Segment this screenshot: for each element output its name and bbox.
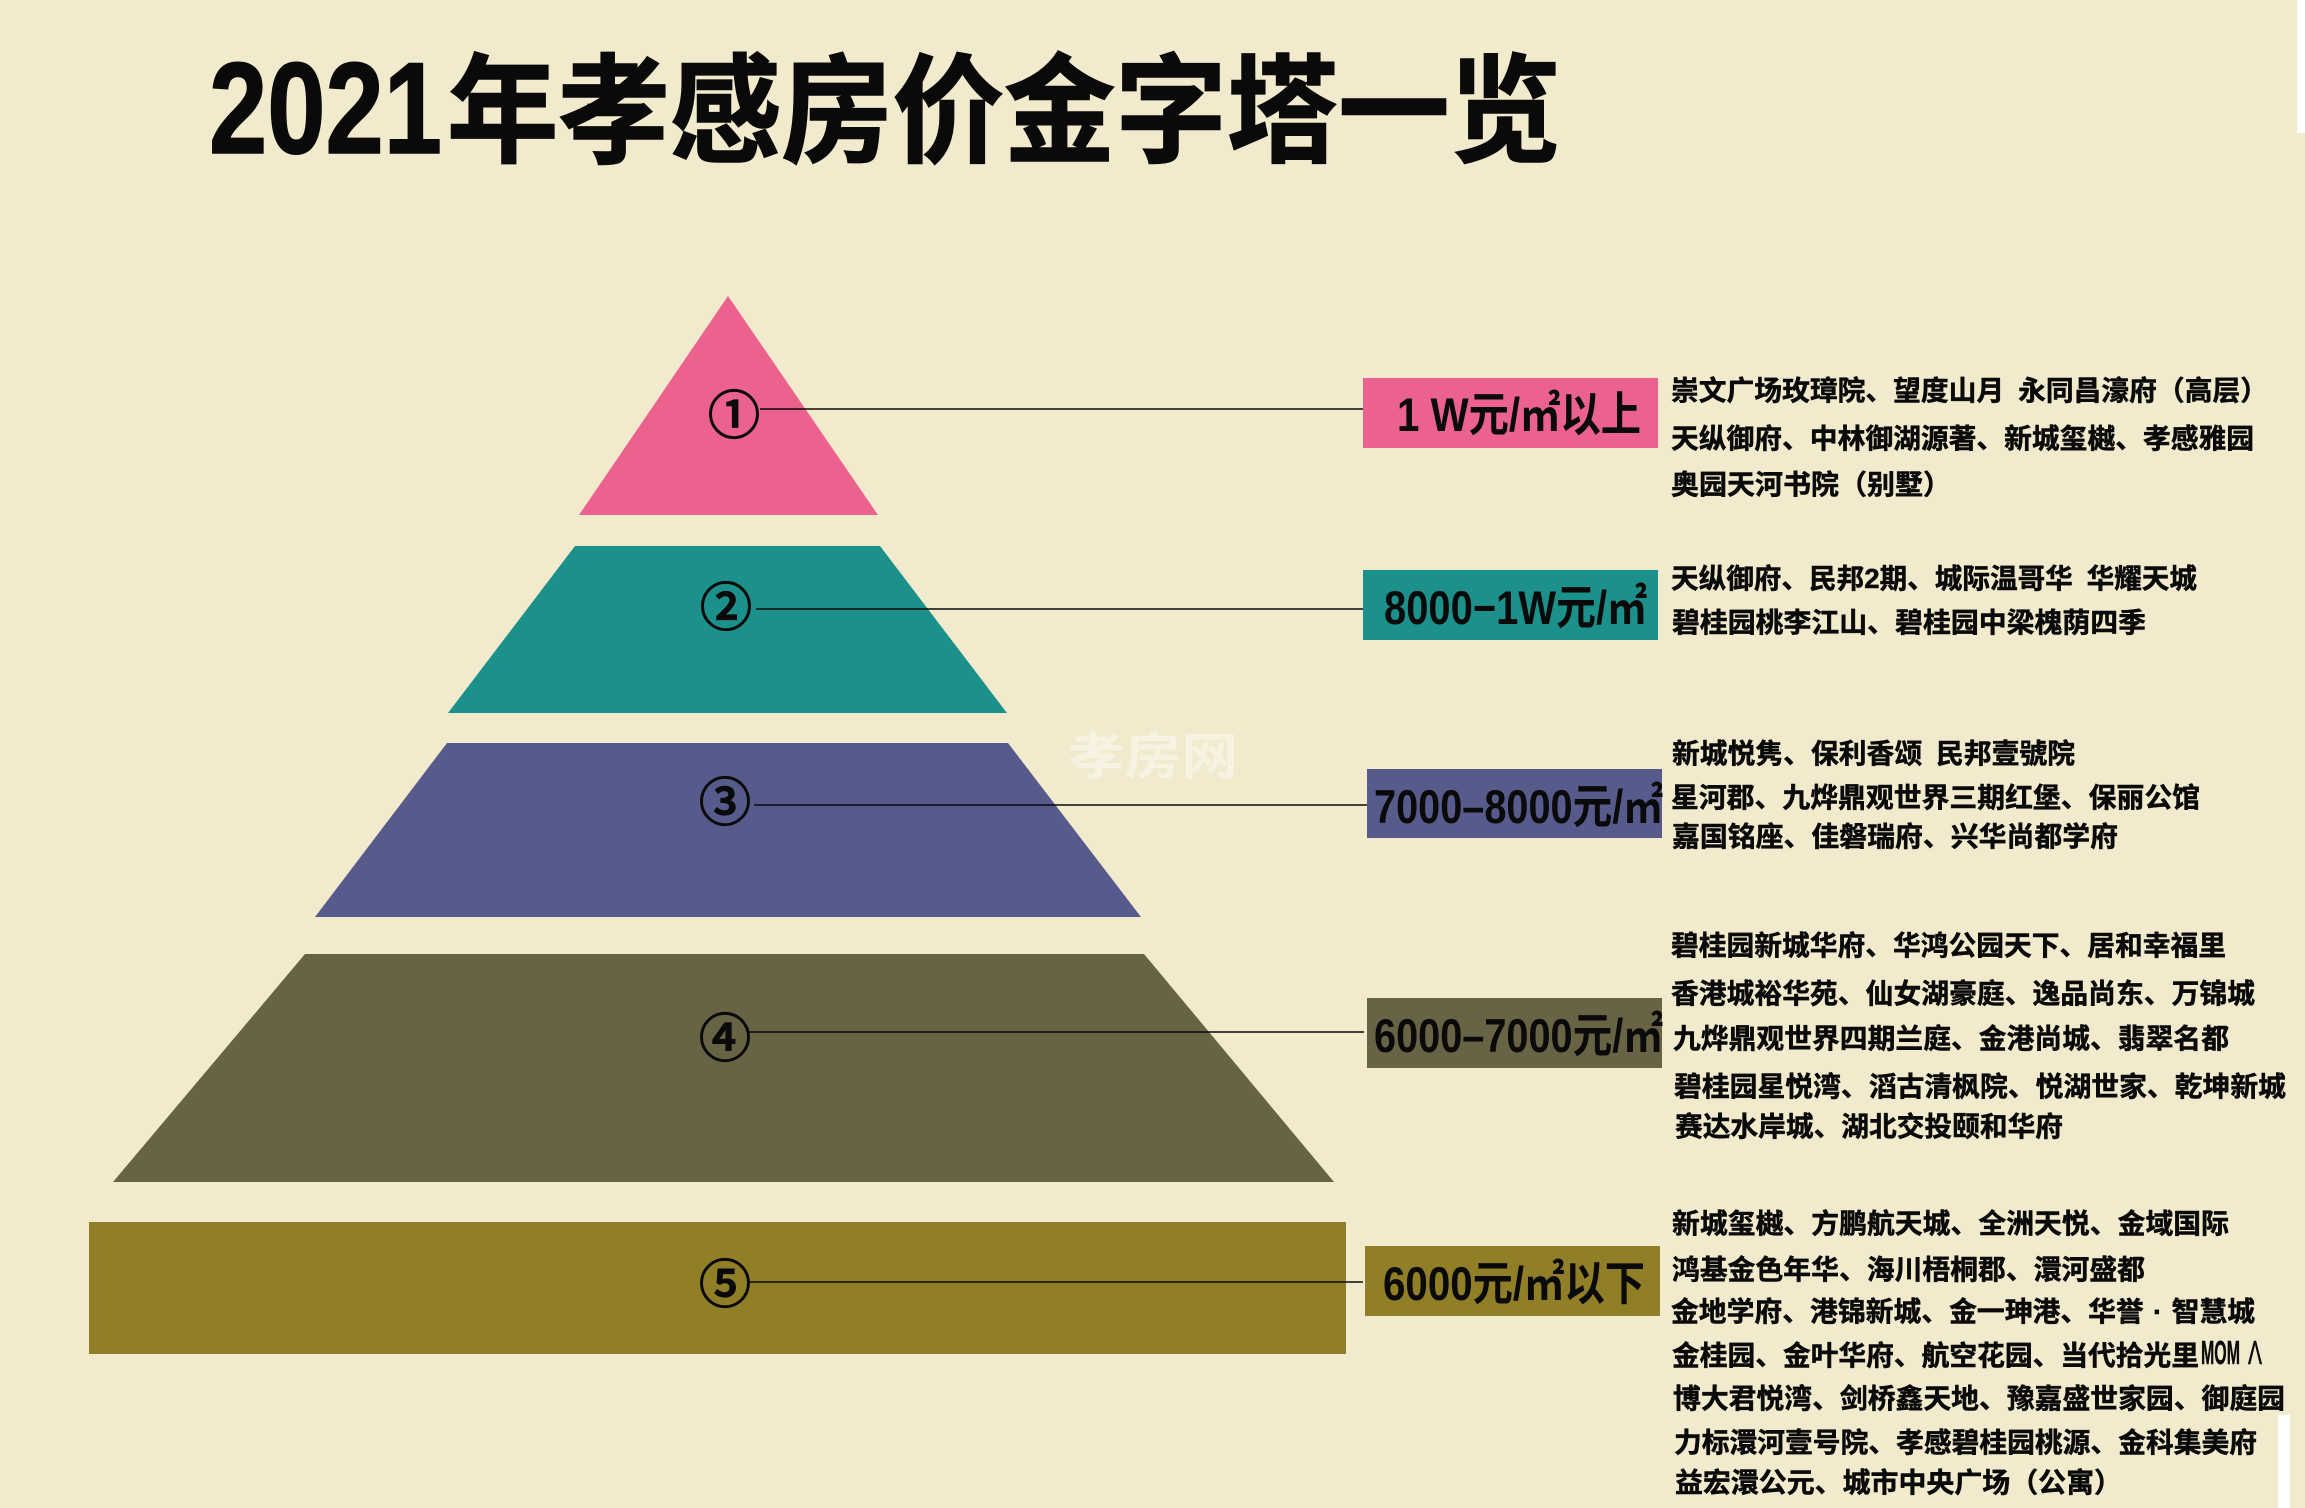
watermark: 孝房网	[1068, 729, 1238, 785]
pyramid segment 3	[315, 743, 1141, 917]
project list 1	[1671, 375, 2268, 500]
price label 2	[1363, 570, 1658, 640]
project list 1: 天纵御府、中林御湖源著、新城玺樾、孝感雅园	[1671, 423, 2254, 454]
price label 5: 6000元/㎡以下	[1383, 1257, 1645, 1310]
project list 5: 益宏澴公元、城市中央广场（公寓）	[1675, 1467, 2122, 1498]
connector 2	[756, 608, 1363, 610]
connector 5	[747, 1281, 1363, 1283]
panel: tier 2	[448, 546, 2197, 713]
project list 4: 赛达水岸城、湖北交投颐和华府	[1675, 1111, 2063, 1142]
connector 3	[754, 804, 1367, 806]
project list 5: 力标澴河壹号院、孝感碧桂园桃源、金科集美府	[1674, 1427, 2257, 1458]
project list 4: 碧桂园新城华府、华鸿公园天下、居和幸福里	[1671, 930, 2226, 961]
project list 5: MOM	[2201, 1334, 2240, 1371]
project list 4: 碧桂园星悦湾、滔古清枫院、悦湖世家、乾坤新城	[1674, 1071, 2286, 1102]
project list 5: 博大君悦湾、剑桥鑫天地、豫嘉盛世家园、御庭园	[1673, 1383, 2285, 1414]
pyramid segment 5	[89, 1222, 1346, 1354]
project list 2: 天纵御府、民邦2期、城际温哥华 华耀天城	[1671, 563, 2197, 594]
marker 3: ③	[699, 761, 751, 836]
pyramid segment 2	[448, 546, 1007, 713]
price label 4: 6000–7000元/㎡	[1374, 1009, 1663, 1062]
panel: tier 4	[113, 930, 2286, 1182]
project list 5: 新城玺樾、方鹏航天城、全洲天悦、金域国际	[1672, 1208, 2229, 1239]
pyramid segment 4	[113, 954, 1334, 1182]
project list 5	[1671, 1208, 2285, 1498]
marker 4: ④	[699, 997, 751, 1072]
project list 1: 崇文广场玫璋院、望度山月 永同昌濠府（高层）	[1671, 375, 2268, 406]
price label 5	[1365, 1246, 1660, 1316]
project list 5: 鸿基金色年华、海川梧桐郡、澴河盛都	[1672, 1254, 2145, 1285]
project list 3: 嘉国铭座、佳磐瑞府、兴华尚都学府	[1672, 821, 2118, 852]
pyramid segment 1	[579, 296, 878, 515]
marker 5: ⑤	[699, 1243, 751, 1318]
project list 4: 香港城裕华苑、仙女湖豪庭、逸品尚东、万锦城	[1671, 978, 2255, 1009]
project list 5: 金桂园、金叶华府、航空花园、当代拾光里	[1672, 1340, 2199, 1371]
price label 2: 8000−1W元/㎡	[1384, 581, 1647, 634]
panel: tier 1	[579, 296, 2268, 515]
marker 2: ②	[700, 566, 752, 641]
project list 4	[1671, 930, 2286, 1142]
connector 4	[747, 1031, 1364, 1033]
project list 1: 奥园天河书院（别墅）	[1671, 469, 1951, 500]
project list 3: 新城悦隽、保利香颂 民邦壹號院	[1672, 738, 2075, 769]
connector 1	[760, 408, 1363, 410]
price label 1	[1363, 378, 1658, 448]
panel: tier 3	[315, 738, 2200, 917]
title: 2021	[209, 35, 442, 181]
price label 3	[1367, 769, 1663, 838]
price label 3: 7000–8000元/㎡	[1374, 780, 1663, 833]
price label 4	[1367, 998, 1663, 1068]
project list 5: Λ	[2248, 1334, 2262, 1371]
marker 1: ①	[708, 374, 760, 449]
price label 1: 1 W元/㎡以上	[1397, 388, 1641, 441]
project list 3	[1671, 738, 2200, 852]
project list 2	[1671, 563, 2197, 638]
project list 2: 碧桂园桃李江山、碧桂园中梁槐荫四季	[1672, 607, 2146, 638]
project list 4: 九烨鼎观世界四期兰庭、金港尚城、翡翠名都	[1673, 1023, 2229, 1054]
title: 年孝感房价金字塔一览	[447, 47, 1561, 179]
project list 3: 星河郡、九烨鼎观世界三期红堡、保丽公馆	[1671, 782, 2200, 813]
project list 5: 金地学府、港锦新城、金一珅港、华誉 · 智慧城	[1671, 1296, 2255, 1327]
panel: tier 5	[89, 1208, 2285, 1498]
